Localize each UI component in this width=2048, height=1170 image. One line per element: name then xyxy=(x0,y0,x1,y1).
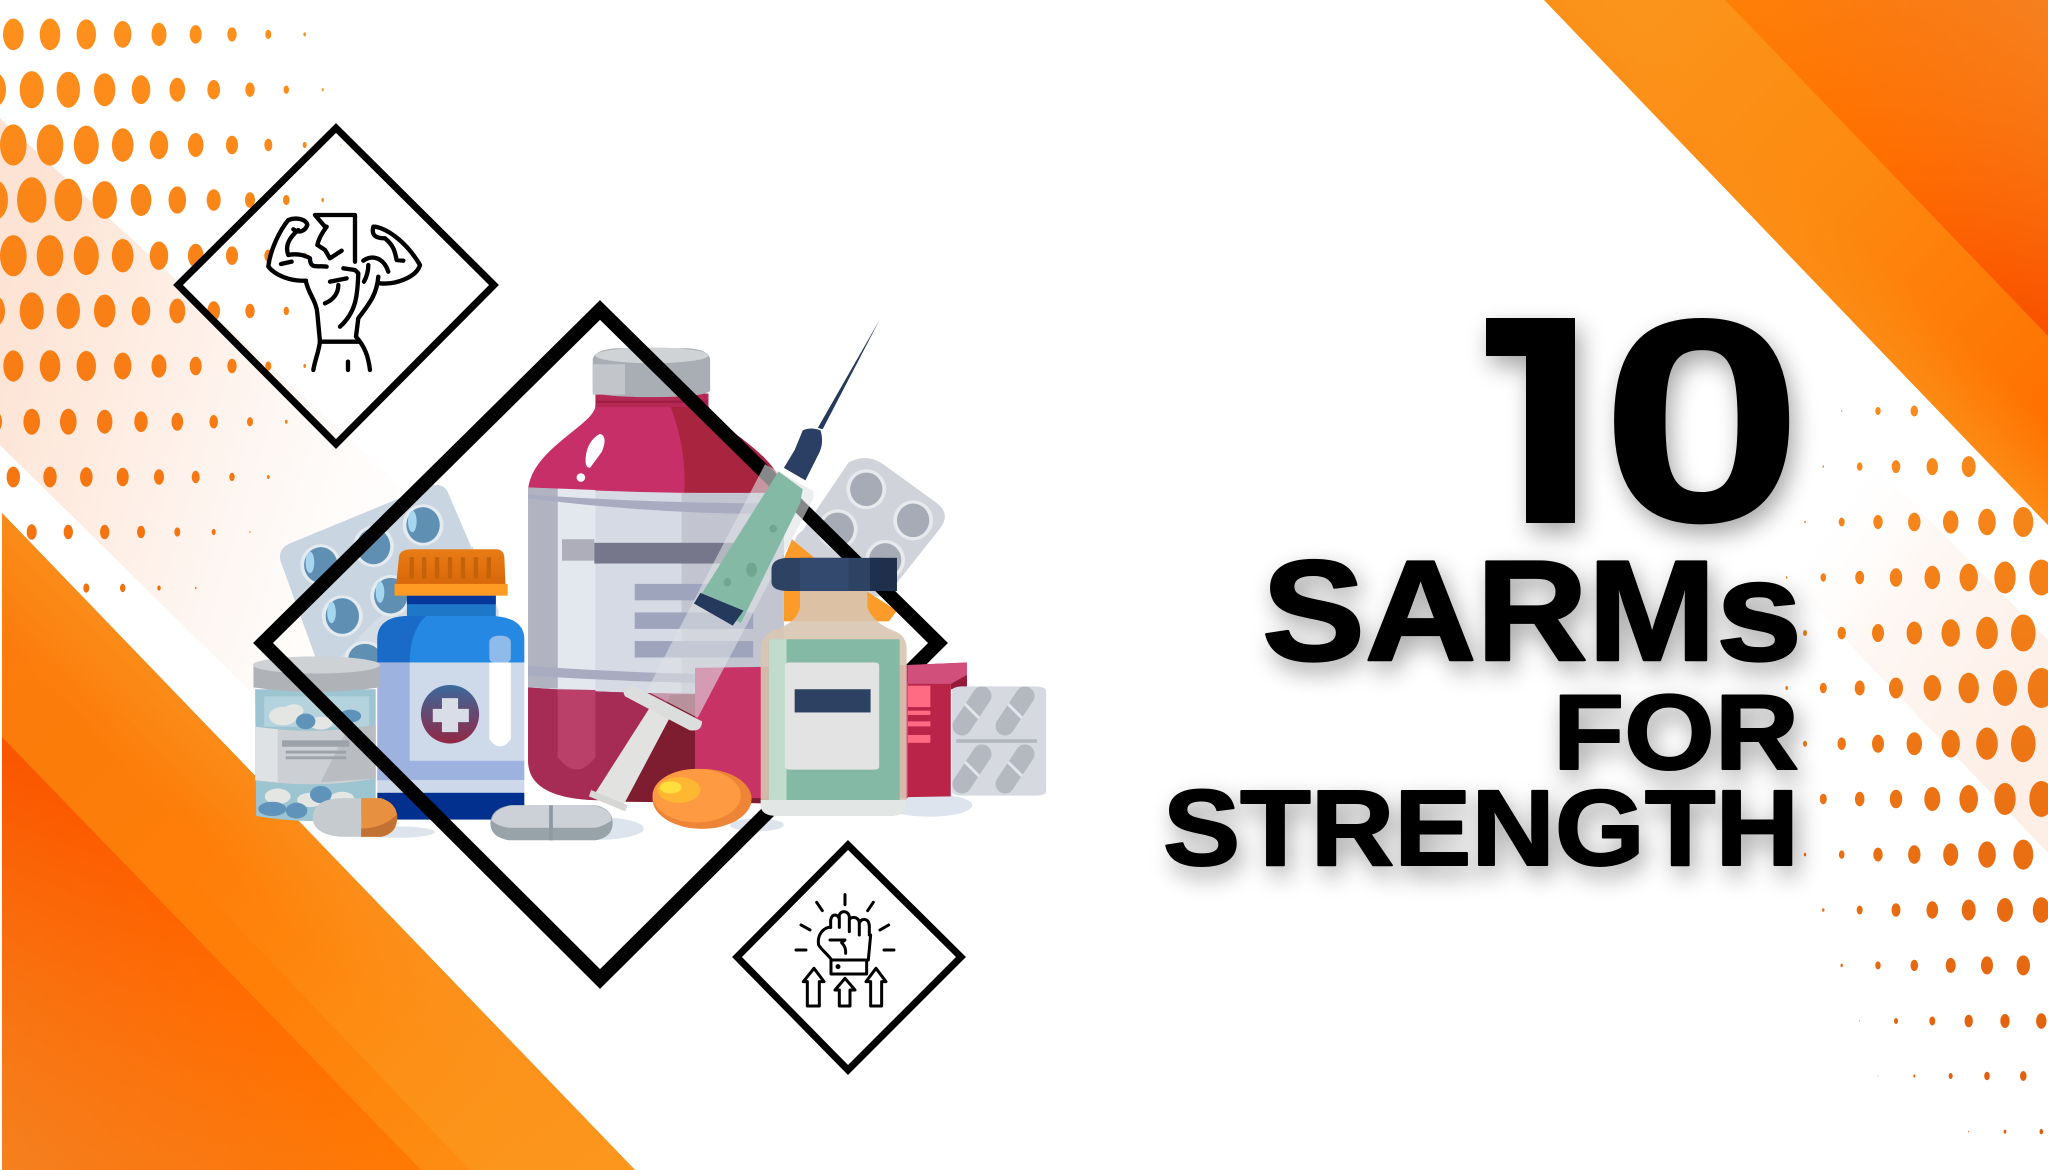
capsule xyxy=(313,798,397,837)
pale diagonal band left xyxy=(0,118,590,770)
medicine illustration, back layer xyxy=(253,347,972,840)
medicine illustration, front layer xyxy=(490,320,1046,840)
blue bottle xyxy=(377,549,524,820)
ground shadows xyxy=(357,794,972,840)
title word STRENGTH: STRENGTH xyxy=(1163,767,1799,888)
title xyxy=(1163,258,1804,888)
orange ball xyxy=(652,769,752,829)
tablet card capsules xyxy=(962,696,1025,784)
syringe xyxy=(589,320,880,811)
pink box xyxy=(695,662,967,798)
bottle label xyxy=(528,487,784,694)
orange corner top right xyxy=(1544,0,2048,525)
title word FOR: FOR xyxy=(1553,672,1799,792)
bottle highlight xyxy=(586,434,605,468)
orange corner bottom left xyxy=(2,513,635,1170)
small diamond frame with fist icon xyxy=(737,845,961,1070)
tablet card xyxy=(952,686,1046,796)
large diamond frame xyxy=(263,310,938,979)
tall red bottle xyxy=(528,347,784,804)
round white tablet xyxy=(490,805,613,840)
halftone dots right xyxy=(1785,406,2048,1134)
pale diagonal band right xyxy=(1740,440,2048,853)
pill jar xyxy=(253,656,380,821)
title number 10 xyxy=(1405,258,1804,583)
title number 10: 0 xyxy=(1600,258,1804,583)
bottle liquid xyxy=(528,687,784,804)
small diamond frame with muscle icon xyxy=(178,128,494,444)
halftone dots left xyxy=(0,19,342,593)
icon: muscular torso xyxy=(268,215,420,370)
icon: raised fist with arrows xyxy=(796,895,894,1006)
orange cap xyxy=(396,549,505,585)
bottle cap xyxy=(593,348,710,397)
right blister pack xyxy=(795,458,945,596)
title word SARMs: SARMs xyxy=(1262,532,1802,691)
left blister pack xyxy=(280,485,498,677)
glass vial xyxy=(761,558,907,816)
title number 10: 1 xyxy=(1405,258,1608,583)
orange item behind vial xyxy=(778,539,897,621)
